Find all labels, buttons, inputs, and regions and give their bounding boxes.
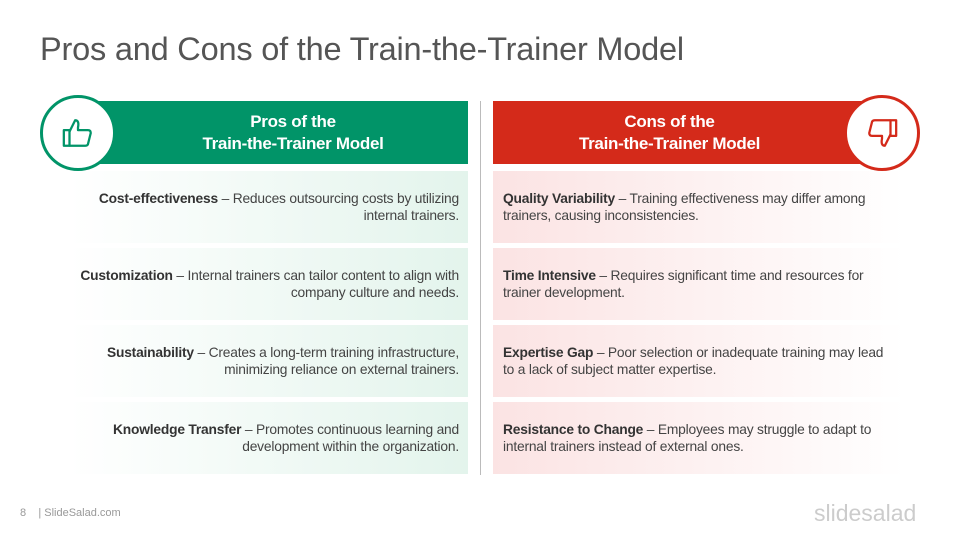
con 2 [493,248,905,320]
divider [480,101,481,475]
logo: slidesalad [814,500,916,526]
con 3: to a lack of subject matter expertise. [503,362,716,377]
pros header [70,101,468,164]
footer: 8 | SlideSalad.com [20,507,121,519]
con 1: Quality Variability – Training effectiveness may differ among [503,191,865,206]
pro 3: Sustainability – Creates a long-term training infrastructure, [107,345,459,360]
con 1 [493,171,905,243]
pro 4: Knowledge Transfer – Promotes continuous learning and [113,422,459,437]
cons header: Train-the-Trainer Model [579,134,760,152]
con 2: trainer development. [503,285,625,300]
con 1: trainers, causing inconsistencies. [503,208,699,223]
con 2: Time Intensive – Requires significant time and resources for [503,268,863,283]
pro 2 [70,248,468,320]
con 4: Resistance to Change – Employees may struggle to adapt to [503,422,871,437]
pro 2: company culture and needs. [291,285,459,300]
title: Pros and Cons of the Train-the-Trainer Model [40,31,684,67]
con 4: internal trainers instead of external ones. [503,439,744,454]
con 4 [493,402,905,474]
cons rows [493,171,883,474]
con 3 [493,325,905,397]
pro 3 [70,325,468,397]
pros header: Pros of the [250,112,336,130]
cons header [493,101,891,164]
pros rows [80,171,468,474]
pro 2: Customization – Internal trainers can tailor content to align with [80,268,459,283]
pro 3: minimizing reliance on external trainers. [224,362,459,377]
icon: thumbs down [844,95,920,171]
pro 4: development within the organization. [242,439,459,454]
pro 4 [70,402,468,474]
pro 1: internal trainers. [364,208,459,223]
pro 1: Cost-effectiveness – Reduces outsourcing costs by utilizing [99,191,459,206]
con 3: Expertise Gap – Poor selection or inadequate training may lead [503,345,883,360]
pro 1 [70,171,468,243]
cons header: Cons of the [624,112,715,130]
pros header: Train-the-Trainer Model [202,134,384,152]
icon: thumbs up [40,95,116,171]
